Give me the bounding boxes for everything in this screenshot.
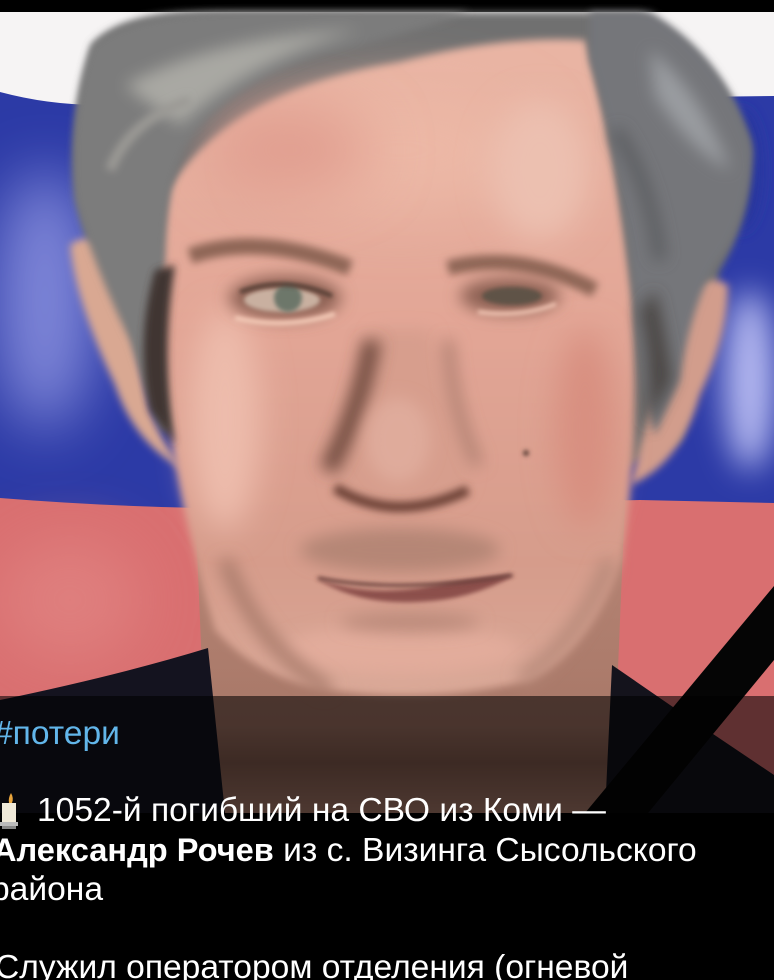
black text area: [0, 813, 774, 980]
mouth: [315, 575, 515, 602]
nose: [333, 330, 470, 505]
eyes: [229, 276, 341, 320]
mole: [523, 450, 529, 456]
ears and neck: [70, 238, 728, 813]
facial features: [190, 246, 595, 632]
mourning ribbon: [585, 586, 774, 813]
clothing: [0, 648, 774, 813]
face: [159, 39, 634, 696]
hair fringe: [73, 12, 752, 445]
eyebrows: [190, 246, 350, 268]
hair back: [74, 12, 751, 470]
icon: candle: [0, 793, 18, 829]
dark overlay band: [0, 696, 774, 813]
mustache shadow: [300, 528, 500, 572]
headline line 2: Александр Рочев из с. Визинга Сысольского: [0, 831, 697, 869]
headline line 1: 1052-й погибший на СВО из Коми —: [37, 792, 606, 829]
